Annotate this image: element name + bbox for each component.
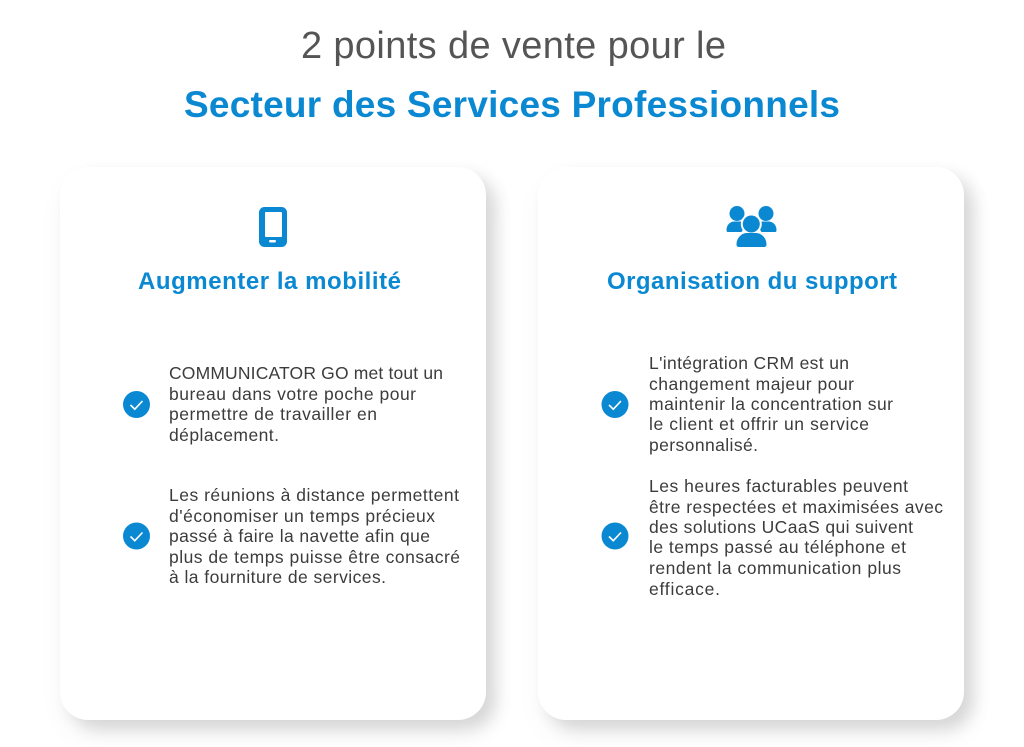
icon: check 3	[602, 391, 628, 418]
text block: réunions à distance: d'économiser un temps précieux	[169, 506, 435, 526]
icon: group of people	[726, 206, 776, 247]
text block: heures facturables: des solutions UCaaS qui suivent	[649, 517, 913, 537]
text block: COMMUNICATOR GO: bureau dans votre poche pour	[169, 384, 416, 404]
text block: COMMUNICATOR GO: permettre de travailler en	[169, 404, 377, 424]
text block: heures facturables: le temps passé au téléphone et	[649, 537, 906, 557]
icon: smartphone	[259, 207, 287, 247]
text block: heures facturables: rendent la communication plus	[649, 558, 901, 578]
text block: réunions à distance: Les réunions à distance permettent	[169, 485, 459, 505]
text block: intégration CRM	[649, 353, 893, 455]
title: first line: 2 points de vente pour le	[301, 25, 726, 67]
icon: check 4	[602, 522, 628, 550]
heading: Organisation du support: Organisation du support	[607, 268, 897, 295]
panel: mobilité	[60, 167, 486, 720]
text block: intégration CRM: personnalisé.	[649, 435, 758, 455]
page header	[184, 25, 840, 125]
text block: réunions à distance: plus de temps puisse être consacré	[169, 547, 460, 567]
text block: réunions à distance: passé à faire la navette afin que	[169, 526, 430, 546]
text block: intégration CRM: maintenir la concentration sur	[649, 394, 893, 414]
heading: Augmenter la mobilité: Augmenter la mobilité	[138, 268, 401, 295]
text block: COMMUNICATOR GO: COMMUNICATOR GO met tout un	[169, 363, 443, 383]
text block: COMMUNICATOR GO	[169, 363, 443, 445]
text block: heures facturables: efficace.	[649, 579, 720, 599]
text block: heures facturables	[649, 476, 943, 599]
icon: check 2	[123, 522, 150, 550]
text block: réunions à distance: à la fourniture de services.	[169, 567, 386, 587]
text block: intégration CRM: changement majeur pour	[649, 374, 854, 394]
text block: heures facturables: être respectées et maximisées avec	[649, 497, 943, 517]
icon: check 1	[123, 391, 150, 418]
panel: support	[538, 167, 964, 720]
text block: heures facturables: Les heures facturables peuvent	[649, 476, 908, 496]
title: highlighted line: Secteur des Services Professionnels	[184, 84, 840, 125]
text block: intégration CRM: L'intégration CRM est un	[649, 353, 849, 373]
text block: intégration CRM: le client et offrir un service	[649, 414, 869, 434]
text block: COMMUNICATOR GO: déplacement.	[169, 425, 279, 445]
text block: réunions à distance	[169, 485, 460, 587]
